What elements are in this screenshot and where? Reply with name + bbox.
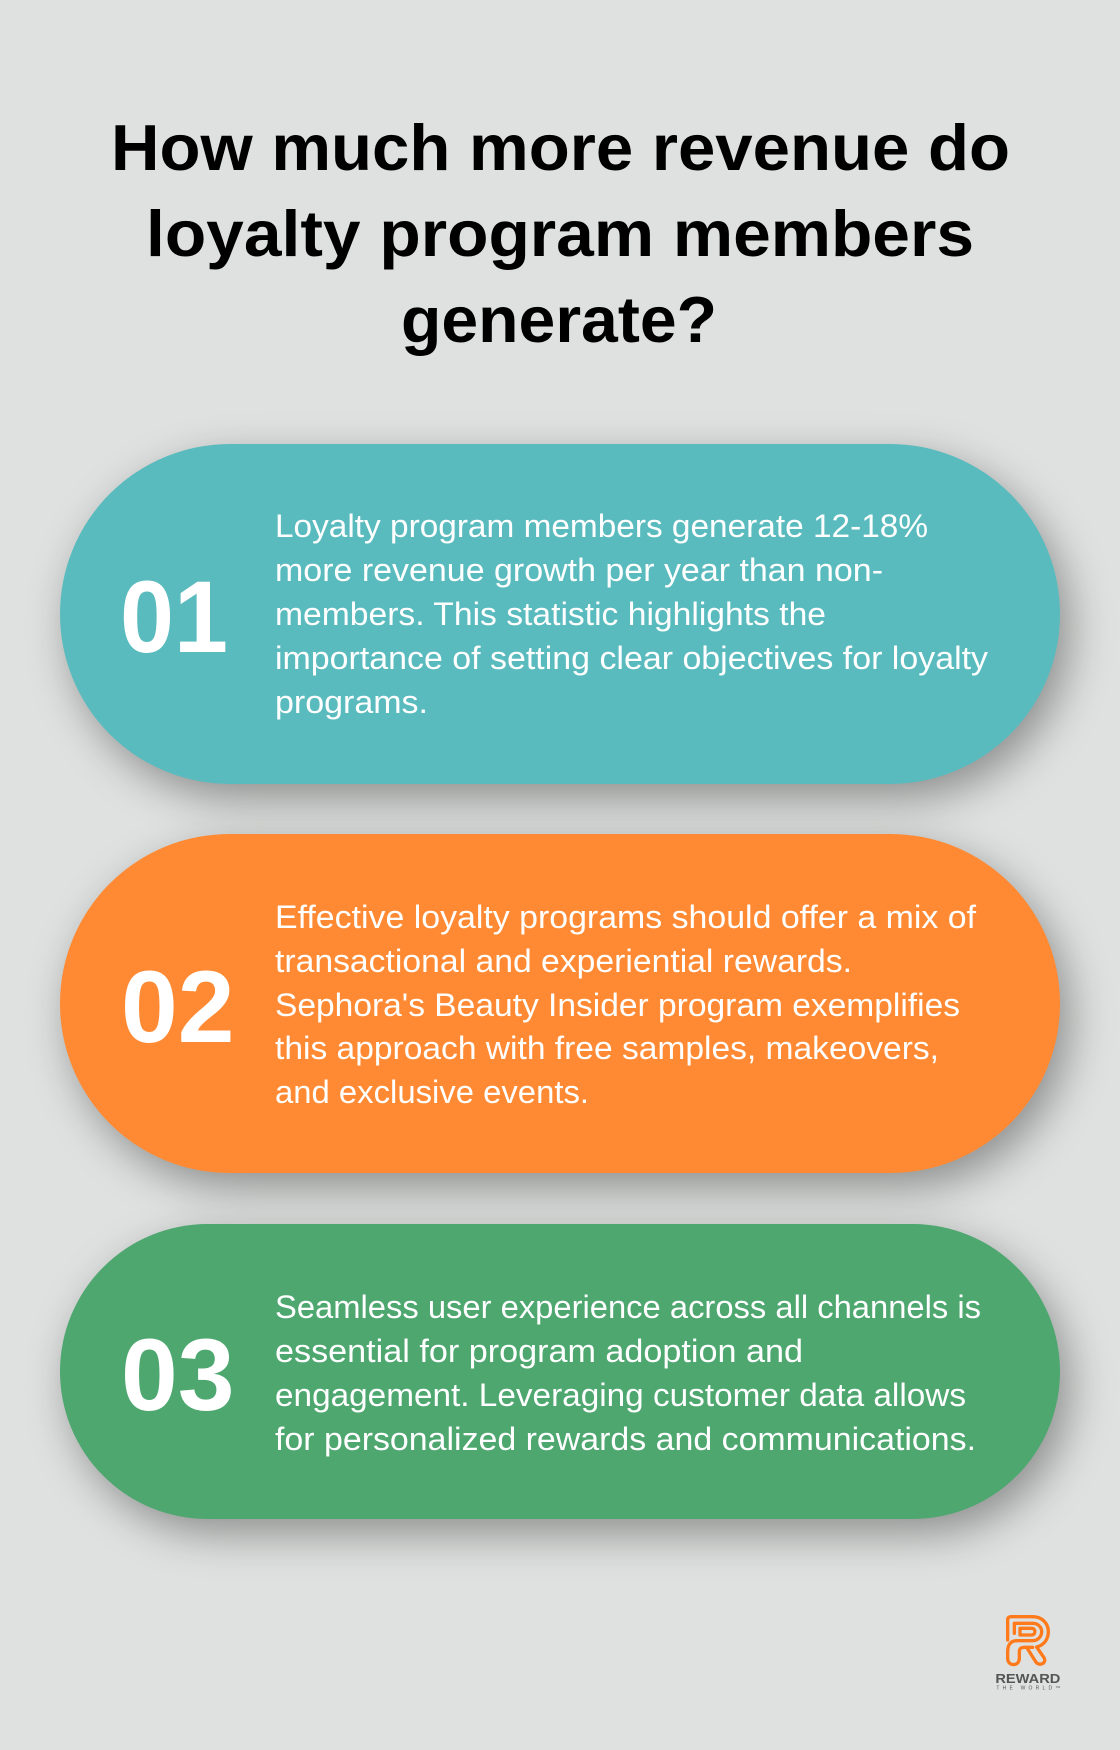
text: step 01 description: importance of setting clear objectives for loyalty [275, 640, 988, 676]
text: step 03 description: Seamless user experience across all channels is [275, 1289, 981, 1325]
panel: step 02 [60, 834, 1060, 1173]
panel: step 01 [60, 444, 1060, 784]
number 03: 03 [121, 1318, 234, 1432]
text: step 02 description: Effective loyalty programs should offer a mix of [275, 899, 976, 935]
wordmark: THE WORLD™ [996, 1686, 1060, 1692]
title: How much more revenue do [111, 111, 1010, 184]
title [111, 111, 1010, 356]
text: step 02 description: and exclusive events. [275, 1074, 589, 1110]
text: step 03 description: engagement. Leveraging customer data allows [275, 1377, 966, 1413]
panel: step 03 [60, 1224, 1060, 1519]
text: step 03 description: for personalized rewards and communications. [275, 1421, 976, 1457]
text: step 02 description [275, 899, 976, 1110]
wordmark: REWARD [995, 1671, 1060, 1686]
title: loyalty program members [146, 197, 974, 270]
title: generate? [401, 283, 717, 356]
text: step 01 description: more revenue growth per year than non- [275, 552, 883, 588]
text: step 01 description [275, 508, 988, 720]
text: step 01 description: programs. [275, 684, 428, 720]
text: step 01 description: members. This statistic highlights the [275, 596, 826, 632]
text: step 01 description: Loyalty program members generate 12-18% [275, 508, 928, 544]
number 02: 02 [121, 950, 234, 1064]
icon: R mark [1008, 1617, 1048, 1665]
text: step 03 description [275, 1289, 981, 1457]
text: step 02 description: Sephora's Beauty Insider program exemplifies [275, 987, 960, 1023]
logo: Reward the World [995, 1615, 1060, 1692]
text: step 02 description: transactional and experiential rewards. [275, 943, 852, 979]
number 01: 01 [120, 560, 228, 674]
text: step 02 description: this approach with free samples, makeovers, [275, 1030, 939, 1066]
text: step 03 description: essential for program adoption and [275, 1333, 803, 1369]
wordmark [995, 1671, 1060, 1692]
